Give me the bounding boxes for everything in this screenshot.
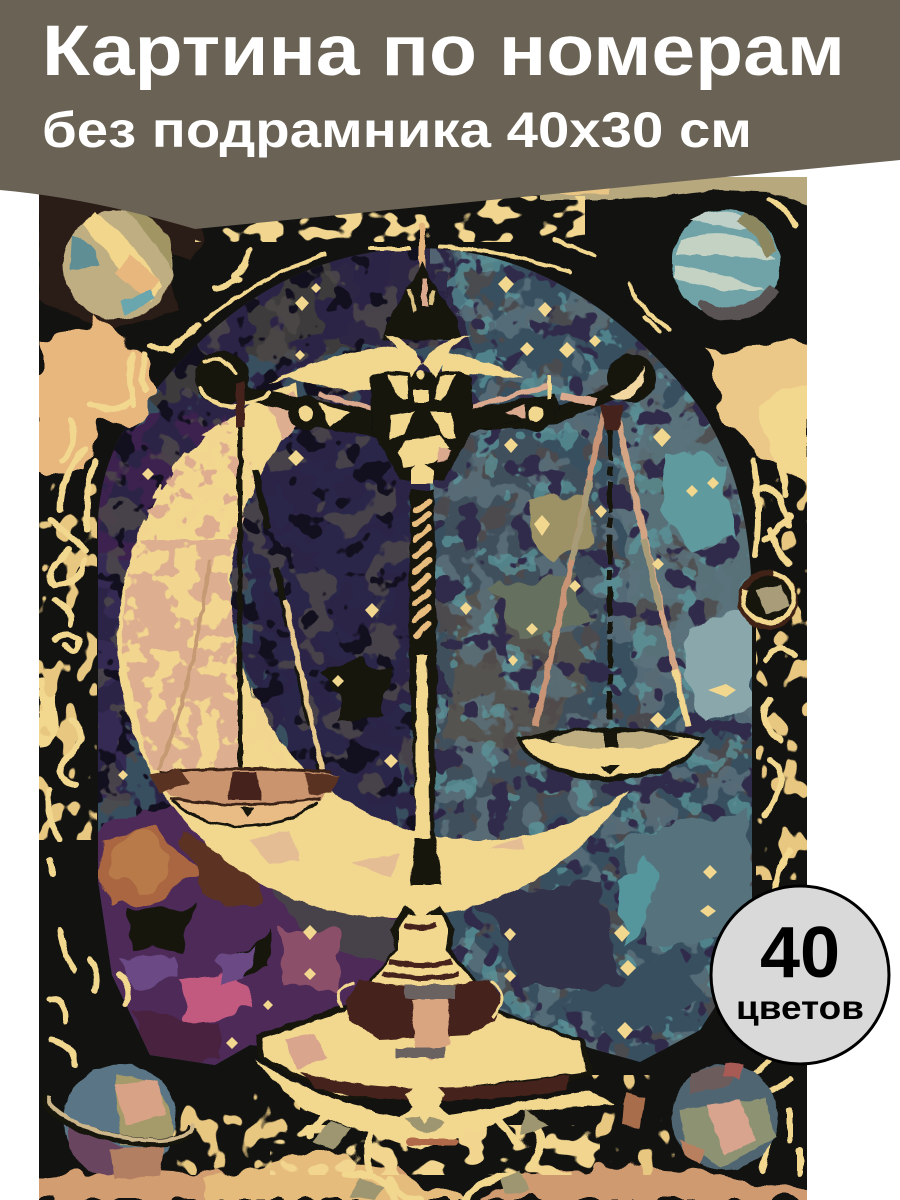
gold filigree noise in frame — [39, 196, 807, 1175]
pole — [409, 490, 442, 885]
pink shading on moon — [120, 420, 260, 775]
subtitle: без подрамника 40х30 см — [42, 102, 752, 158]
badge label: цветов — [736, 989, 864, 1026]
planet: top right — [672, 209, 780, 321]
badge: 40 colours — [711, 886, 889, 1064]
crescent moon — [118, 382, 628, 918]
right pan and chains — [516, 405, 705, 782]
decorative ring: right side — [738, 570, 798, 630]
blotchy paint-by-number texture — [98, 248, 752, 1060]
left pan and chains — [150, 382, 340, 826]
planet: top left — [63, 210, 173, 320]
beam — [195, 351, 656, 440]
base scrollwork — [310, 1075, 645, 1200]
ornamental gold masses — [39, 320, 807, 1200]
gold filigree border — [48, 200, 800, 1175]
nebula lower left — [98, 805, 397, 1065]
planet: bottom left with ring — [47, 1064, 193, 1180]
base of the scale — [255, 905, 615, 1150]
sand coloured top strip — [39, 170, 807, 330]
badge number: 40 — [760, 913, 840, 993]
stars — [118, 276, 736, 1049]
balance scale — [150, 262, 705, 885]
nebula accents — [330, 450, 752, 1040]
central ornament — [268, 262, 523, 484]
planet: bottom right — [672, 1062, 778, 1170]
title: Картина по номерам — [42, 12, 845, 91]
cosmic arch background — [90, 240, 770, 1075]
painting: libra scales on crescent moon — [39, 170, 807, 1200]
title banner — [0, 0, 900, 229]
